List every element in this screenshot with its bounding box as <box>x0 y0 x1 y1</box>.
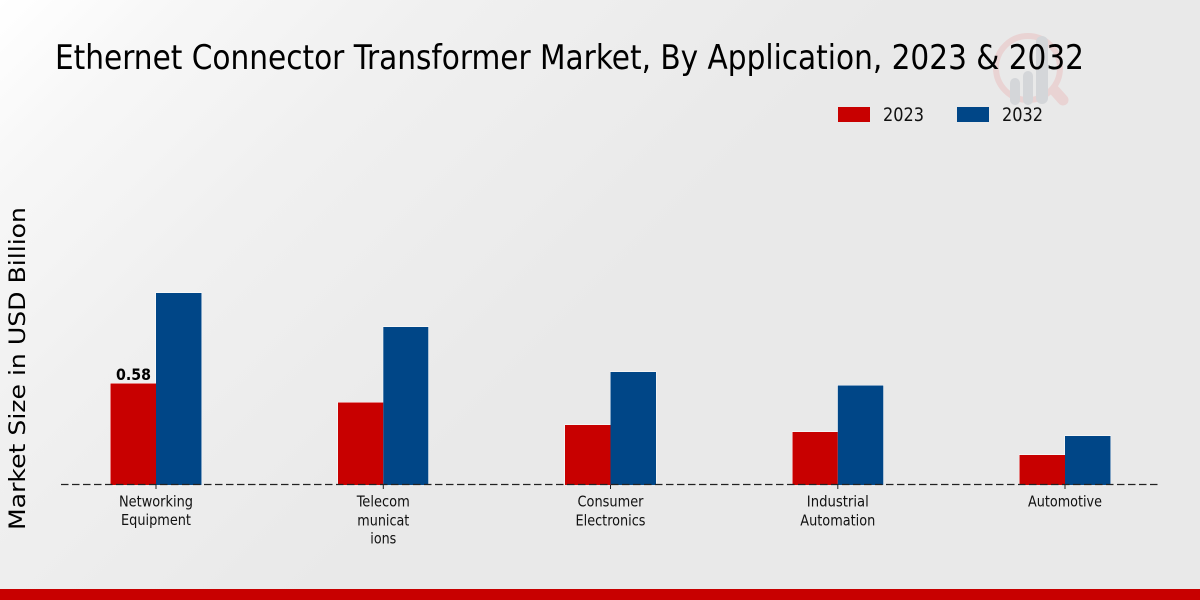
category label: Telecommunications: ions <box>370 530 396 548</box>
x-axis baseline <box>61 484 1160 486</box>
value label 0.58: 0.58 <box>116 365 151 384</box>
legend swatch 2023 <box>838 107 870 122</box>
bars: Industrial Automation <box>792 385 884 485</box>
category label: Telecommunications <box>356 492 410 548</box>
category label: Networking Equipment: Networking <box>119 492 193 510</box>
category label: Industrial Automation: Industrial <box>807 492 869 510</box>
legend label 2023: 2023 <box>883 104 924 126</box>
bar chart <box>110 292 1111 485</box>
icon: watermark magnifier with bars <box>996 36 1063 100</box>
legend swatch 2032 <box>957 107 989 122</box>
category label: Telecommunications: municat <box>357 512 410 530</box>
category label: Telecommunications: Telecom <box>356 492 410 510</box>
category label: Consumer Electronics: Consumer <box>578 492 644 510</box>
title: Ethernet Connector Transformer Market, By Application, 2023 & 2032 <box>55 38 1084 78</box>
footer bar <box>0 589 1200 600</box>
bars: Telecommunications <box>338 326 429 485</box>
category label: Consumer Electronics <box>576 492 646 530</box>
category label: Consumer Electronics: Electronics <box>576 512 646 530</box>
legend <box>838 104 1043 126</box>
legend label 2032: 2032 <box>1002 104 1043 126</box>
category label: Industrial Automation: Automation <box>800 512 875 530</box>
category label: Industrial Automation <box>800 492 875 530</box>
bars: Automotive <box>1019 436 1111 485</box>
bars: Consumer Electronics <box>564 372 656 485</box>
category label: Networking Equipment <box>119 492 193 529</box>
bars: Networking Equipment <box>110 292 202 485</box>
category label: Networking Equipment: Equipment <box>121 511 191 529</box>
x-axis ticks <box>156 485 1065 489</box>
y-axis label: Market Size in USD Billion <box>5 207 31 530</box>
category label: Automotive: Automotive <box>1028 492 1102 510</box>
